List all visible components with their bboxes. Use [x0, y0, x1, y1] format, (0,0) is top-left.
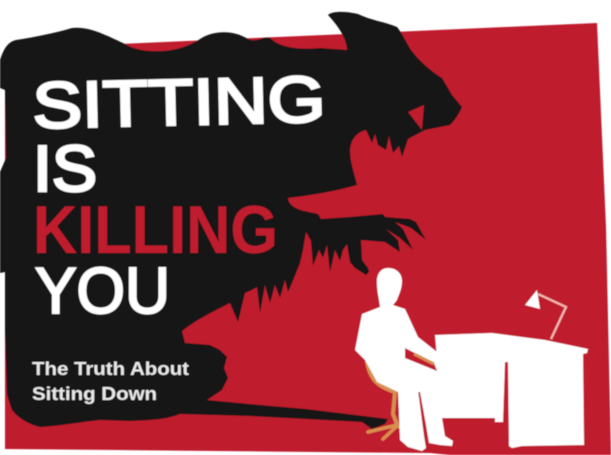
desk with far leg [398, 333, 588, 448]
subtitle line 1: The Truth About [32, 358, 189, 379]
subtitle [32, 358, 189, 404]
monster eye [408, 105, 424, 130]
lamp arm [538, 294, 566, 339]
chair feet [368, 425, 418, 439]
title line: is: IS [33, 132, 97, 205]
person silhouette [355, 268, 438, 451]
chair [367, 362, 418, 439]
subtitle line 2: Sitting Down [32, 383, 157, 404]
armrest highlight [414, 354, 434, 364]
title [32, 62, 326, 327]
armrest [405, 348, 437, 371]
title line: you: YOU [35, 254, 170, 327]
chair back and post [367, 362, 397, 424]
desk lamp [525, 290, 566, 339]
title line: sitting: SITTING [32, 62, 326, 142]
title line: killing: KILLING [33, 192, 278, 268]
monster shadow silhouette [0, 12, 462, 429]
lamp shade [525, 290, 540, 309]
